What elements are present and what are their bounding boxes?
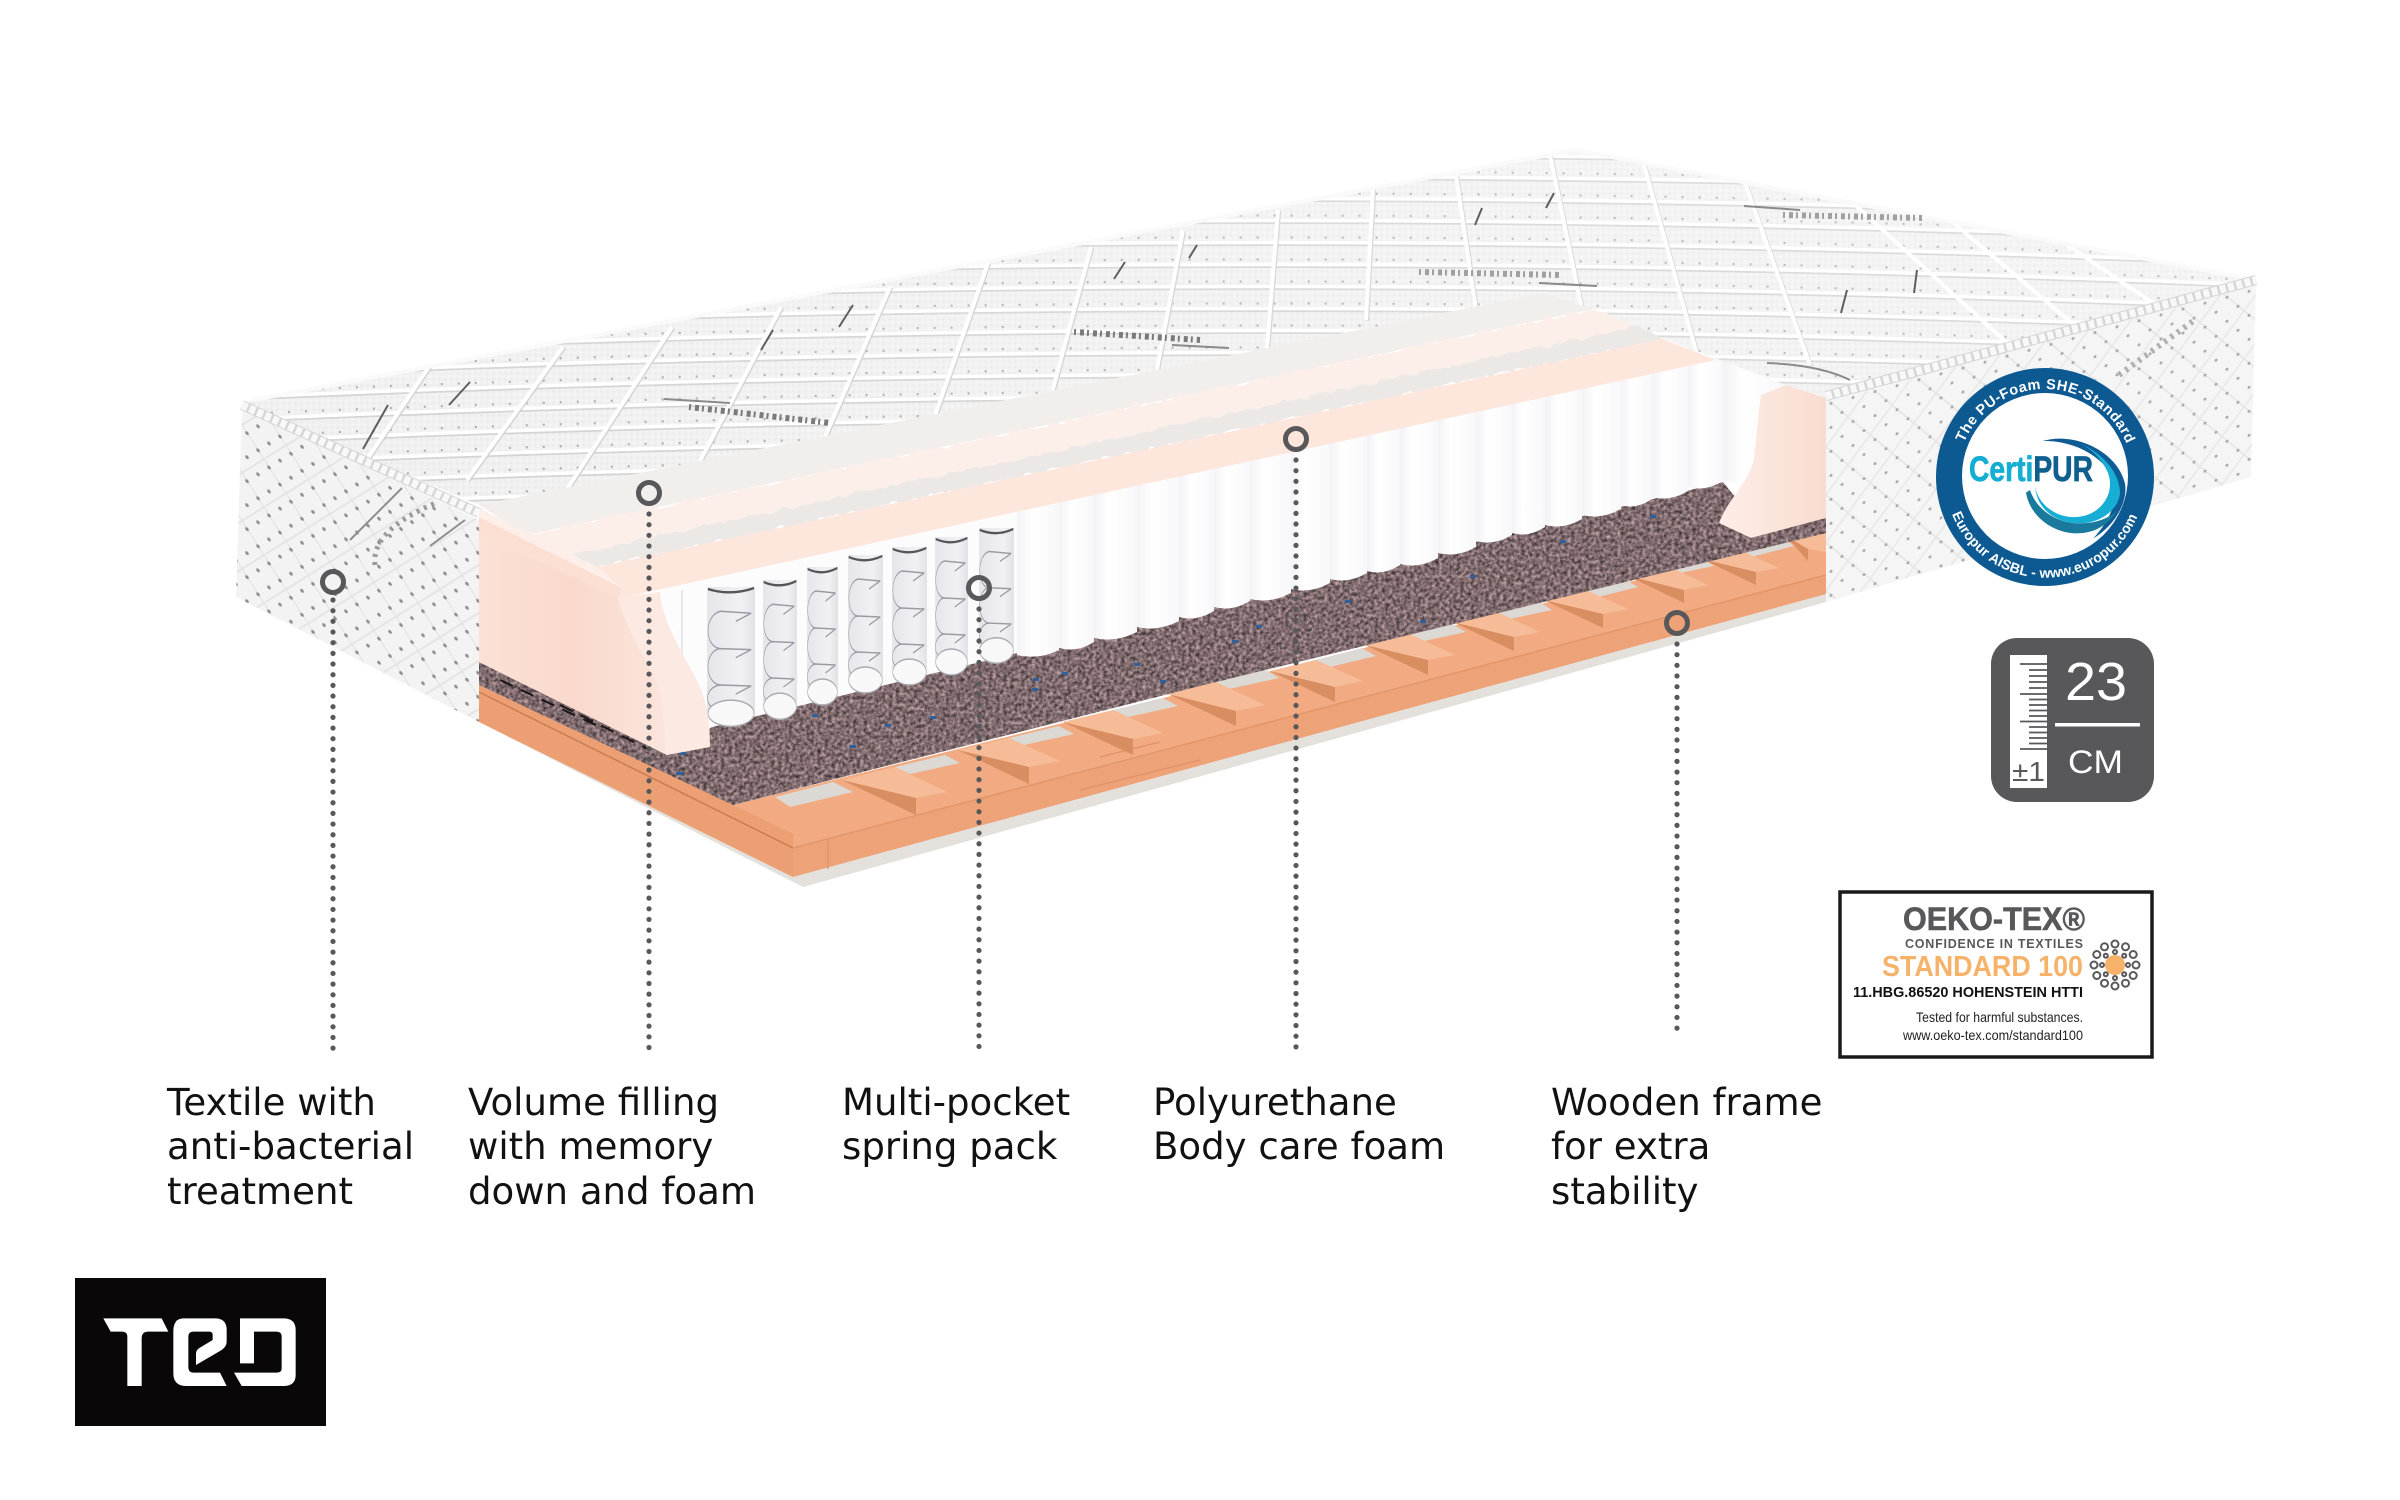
marker: wooden frame	[1666, 612, 1688, 1033]
badge: CertiPUR seal	[1936, 368, 2154, 586]
mattress cross-section illustration	[220, 127, 2280, 887]
left foam end block	[479, 535, 710, 755]
label: spring pack: Multi-pocket	[842, 1081, 1070, 1124]
badge: mattress height 23 cm	[1991, 638, 2154, 802]
volume filling down layer	[527, 309, 1638, 555]
marker: polyurethane foam	[1286, 428, 1306, 1048]
ruler icon: ±1	[2012, 756, 2045, 787]
badge: OEKO-TEX Standard 100: Tested for harmful substances.	[1916, 1009, 2083, 1025]
badge: OEKO-TEX Standard 100: www.oeko-tex.com/standard100	[1902, 1027, 2083, 1043]
fabric underlay	[479, 590, 1826, 887]
wooden frame	[479, 527, 1826, 877]
height unit: CM	[2068, 744, 2123, 780]
height value: 23	[2065, 652, 2127, 712]
felt insulation layer	[479, 482, 1826, 805]
badge: OEKO-TEX Standard 100: OEKO-TEX®	[1903, 901, 2085, 937]
badge: OEKO-TEX Standard 100: STANDARD 100	[1882, 951, 2083, 983]
seal upper ring text: The PU-Foam SHE-Standard	[1955, 379, 2136, 443]
seal wordmark: CertiPUR	[1969, 450, 2093, 489]
logo: TED	[75, 1278, 326, 1426]
label: textile: treatment	[167, 1170, 353, 1213]
badge: OEKO-TEX Standard 100: CONFIDENCE IN TEXTILES	[1905, 937, 2083, 951]
wooden slats	[842, 527, 1826, 815]
icon: oeko-tex flower	[2090, 940, 2140, 990]
label: polyurethane foam: Polyurethane	[1153, 1081, 1397, 1124]
label: textile: anti-bacterial	[167, 1125, 414, 1168]
gaps between slats	[775, 538, 1794, 807]
right foam end block	[1719, 385, 1826, 538]
piping seam	[242, 280, 2256, 513]
marker: spring pack	[968, 578, 990, 1048]
label: volume filling: Volume filling	[468, 1081, 719, 1124]
marker: textile	[322, 572, 344, 1049]
label: polyurethane foam: Body care foam	[1153, 1125, 1445, 1168]
multi-pocket spring pack	[655, 340, 1790, 727]
seal swirl	[2026, 439, 2125, 538]
memory foam layer	[479, 293, 1593, 535]
marker: volume filling	[638, 482, 660, 1048]
label: textile: Textile with	[166, 1081, 376, 1124]
quilted top surface	[248, 152, 2239, 505]
label: spring pack: spring pack	[842, 1125, 1058, 1168]
left side textile panel	[236, 408, 479, 722]
polyurethane foam layer	[570, 326, 1663, 567]
plain pocket background	[655, 350, 1790, 727]
badge: OEKO-TEX Standard 100	[1840, 892, 2152, 1057]
open pockets with springs	[707, 528, 1014, 726]
label: wooden frame: Wooden frame	[1551, 1081, 1822, 1124]
label: wooden frame: for extra	[1551, 1125, 1710, 1168]
seal lower ring text: Europur AISBL - www.europur.com	[1952, 511, 2138, 578]
body care foam sheet	[479, 339, 1716, 598]
right side textile panel	[1826, 282, 2256, 602]
label: wooden frame: stability	[1551, 1170, 1698, 1213]
closed pockets	[1017, 340, 1785, 657]
badge: OEKO-TEX Standard 100: 11.HBG.86520 HOHENSTEIN HTTI	[1853, 984, 2083, 1001]
label: volume filling: with memory	[468, 1125, 713, 1168]
label: volume filling: down and foam	[468, 1170, 756, 1213]
ruler icon	[2010, 655, 2047, 788]
